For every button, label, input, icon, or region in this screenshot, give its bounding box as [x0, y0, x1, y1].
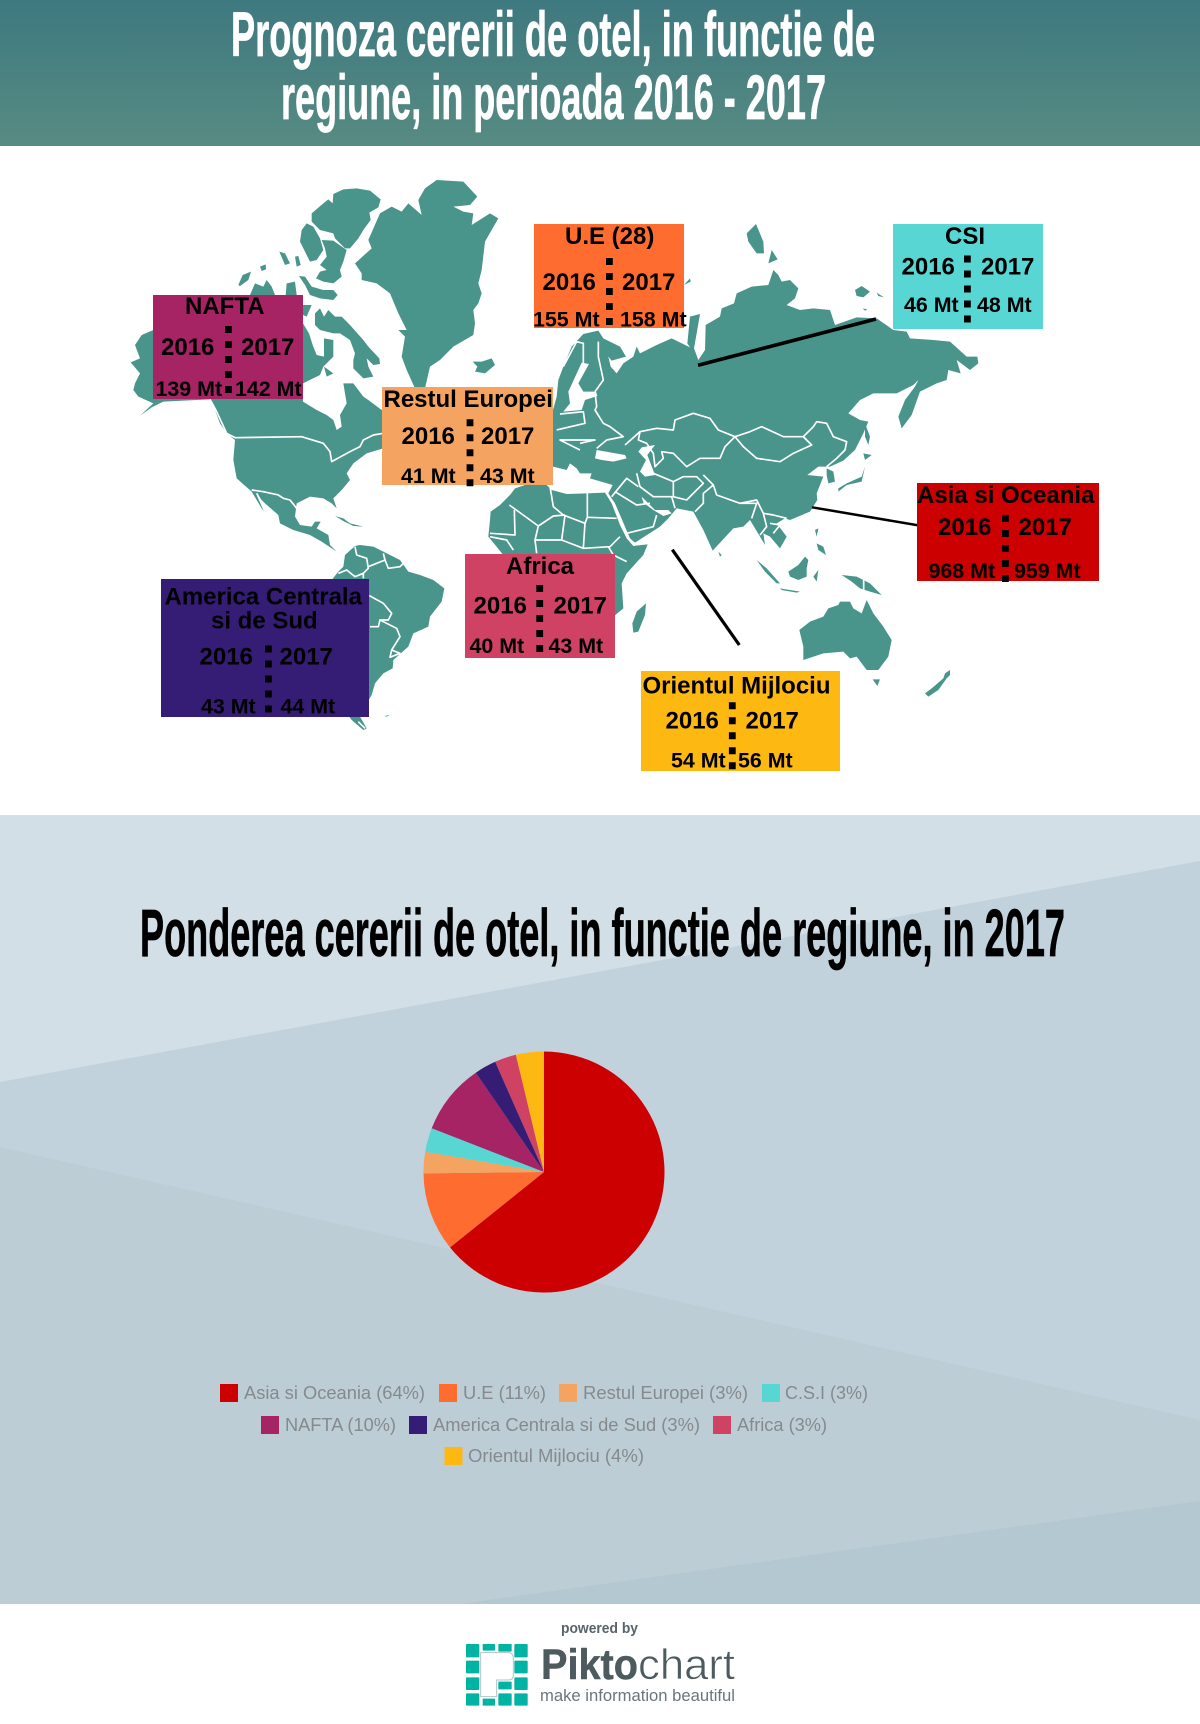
panel: Orientul Mijlociu: 56 Mt [738, 748, 793, 772]
panel: America Centrala si de Sud: 2017 [280, 643, 333, 670]
panel: Restul Europei [382, 386, 553, 488]
panel: CSI: 2017 [981, 253, 1034, 280]
map: oceania and southeast asia islands [718, 453, 950, 697]
chart legend: Asia si Oceania (64%) [244, 1383, 425, 1403]
panel: Restul Europei: 2017 [481, 423, 534, 450]
panel: Africa: 2016 [474, 592, 527, 619]
panel: U.E: 2017 [622, 269, 675, 296]
panel: CSI: 48 Mt [977, 293, 1032, 317]
icon: Piktochart logo [466, 1644, 528, 1706]
panel: share section background [0, 815, 1200, 1604]
panel: Restul Europei: 41 Mt [401, 464, 456, 488]
panel: Asia si Oceania: Asia si Oceania [917, 482, 1095, 509]
panel: NAFTA: 142 Mt [235, 377, 302, 401]
panel: Orientul Mijlociu: 2017 [746, 707, 799, 734]
panel: America Centrala si de Sud: America Centrala [164, 584, 363, 611]
main title [231, 0, 875, 133]
tagline: make information beautiful [540, 1686, 735, 1705]
map: greenland and iceland [355, 180, 498, 388]
chart legend: America Centrala si de Sud (3%) [433, 1415, 700, 1435]
panel: Africa [465, 553, 615, 658]
panel: Africa: Africa [506, 553, 575, 580]
panel: Asia si Oceania: 968 Mt [928, 559, 995, 583]
panel: U.E: 155 Mt [533, 307, 600, 331]
panel: Orientul Mijlociu: 54 Mt [671, 748, 726, 772]
panel: NAFTA: 139 Mt [156, 377, 222, 401]
panel: U.E: 2016 [542, 269, 596, 296]
panel: America Centrala si de Sud: si de Sud [211, 608, 318, 635]
panel: Restul Europei: Restul Europei [384, 386, 553, 413]
map: eurasia [553, 224, 978, 551]
panel: NAFTA: NAFTA [185, 293, 265, 320]
footer: Piktochart credit [466, 1620, 735, 1706]
panel: Asia si Oceania: 959 Mt [1014, 559, 1081, 583]
pie chart [423, 1052, 664, 1293]
panel: Africa: 2017 [554, 592, 607, 619]
panel: CSI [893, 223, 1043, 329]
chart legend: U.E (11%) [463, 1383, 546, 1403]
panel: Africa: 40 Mt [470, 634, 524, 658]
line: CSI connector [698, 319, 876, 365]
panel: America Centrala si de Sud [161, 579, 369, 718]
panel: NAFTA: 2016 [161, 334, 214, 361]
panel: Asia si Oceania: 2016 [938, 514, 991, 541]
map: africa [488, 483, 648, 640]
panel: U.E: U.E (28) [565, 223, 654, 250]
panel: Restul Europei: 2016 [402, 423, 455, 450]
panel: CSI: 2016 [902, 253, 955, 280]
map: south america and caribbean [300, 516, 444, 730]
panel: CSI: CSI [945, 223, 985, 250]
chart legend: Africa (3%) [737, 1415, 827, 1435]
panel: Africa: 43 Mt [548, 634, 603, 658]
panel: Asia si Oceania [917, 482, 1099, 583]
panel: America Centrala si de Sud: 43 Mt [201, 694, 256, 718]
line: Asia connector [812, 507, 928, 527]
line: Middle East connector [672, 550, 739, 645]
wordmark: Pikto [541, 1641, 638, 1689]
header banner [0, 0, 1200, 146]
footer: Piktochart credit: chart [638, 1641, 735, 1689]
map: north america and arctic [131, 188, 387, 552]
panel: Orientul Mijlociu: Orientul Mijlociu [642, 672, 831, 700]
panel: America Centrala si de Sud: 44 Mt [280, 694, 335, 718]
chart legend: Orientul Mijlociu (4%) [468, 1446, 644, 1466]
panel: Orientul Mijlociu [641, 671, 840, 772]
chart legend: Restul Europei (3%) [583, 1383, 748, 1403]
panel: Orientul Mijlociu: 2016 [666, 707, 719, 734]
panel: U.E [533, 223, 687, 331]
panel: Asia si Oceania: 2017 [1018, 514, 1072, 541]
chart legend [220, 1383, 868, 1466]
chart legend: NAFTA (10%) [285, 1415, 396, 1435]
panel: NAFTA: 2017 [241, 334, 294, 361]
panel: U.E: 158 Mt [620, 307, 687, 331]
powered by text: powered by [561, 1620, 639, 1637]
panel: NAFTA [153, 293, 303, 401]
panel: America Centrala si de Sud: 2016 [200, 643, 253, 670]
panel: CSI: 46 Mt [904, 293, 959, 317]
chart legend: C.S.I (3%) [785, 1383, 868, 1403]
world map [131, 180, 978, 730]
panel: Restul Europei: 43 Mt [480, 464, 535, 488]
